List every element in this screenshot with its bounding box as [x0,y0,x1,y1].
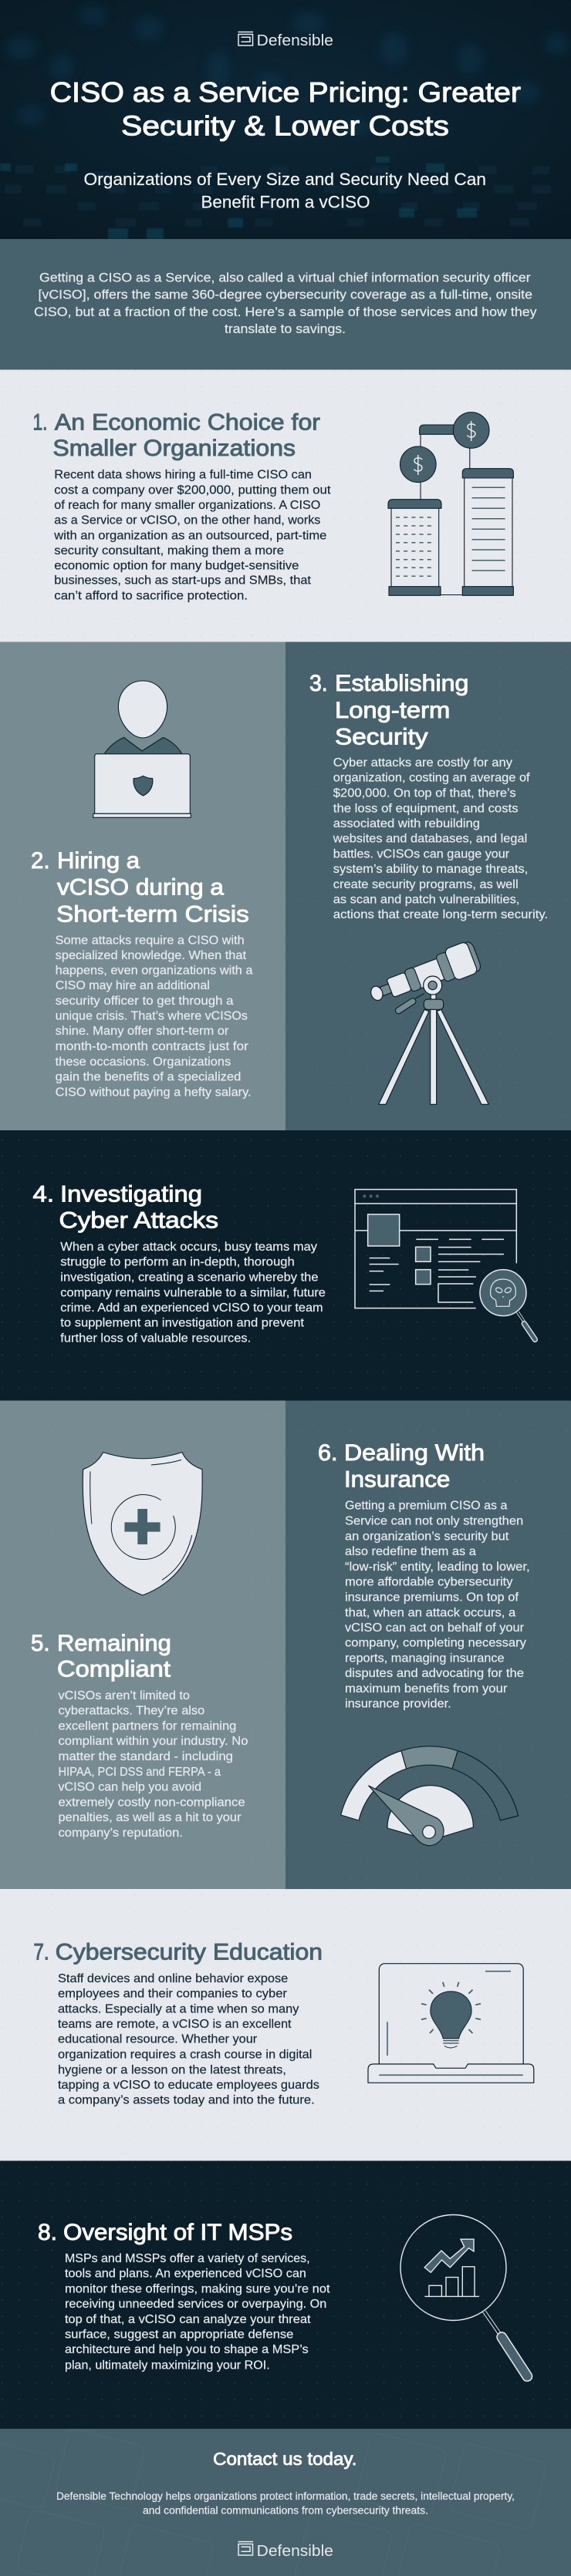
heading 4 [32,1181,218,1234]
body 4: to supplement an investigation and prevent [60,1317,305,1330]
panel: 7 education [0,1889,571,2160]
body 3: Cyber attacks are costly for any [333,756,512,769]
body 2: happens, even organizations with a [56,964,253,978]
body 5: HIPAA, PCI DSS and FERPA - a [59,1766,221,1779]
body 6: that, when an attack occurs, a [345,1606,515,1619]
heading 4: Investigating [60,1181,202,1207]
panel: 5 remaining compliant [0,1400,286,1889]
body 7 [58,1972,319,2107]
heading 7: Cybersecurity Education [56,1940,323,1965]
heading 2: Hiring a [57,848,140,874]
icon: person with laptop [93,681,191,817]
heading 1: An Economic Choice for [55,409,320,435]
body 8: surface, suggest an appropriate defense [65,2329,293,2342]
intro text: Getting a CISO as a Service, also called a virtual chief information security officer [39,271,531,285]
footer text: and confidential communications from cybersecurity threats. [143,2504,428,2517]
body 2: Some attacks require a CISO with [56,934,245,947]
icon: shield with cross [83,1453,202,1595]
body 6: an organization’s security but [345,1530,509,1544]
heading 7: 7. [33,1940,49,1965]
panel: 8 oversight [0,2160,571,2429]
body 3: associated with rebuilding [333,817,480,830]
body 3: organization, costing an average of [333,772,530,785]
body 1: with an organization as an outsourced, part-time [53,529,326,542]
body 1: Recent data shows hiring a full-time CISO can [54,468,312,481]
footer logo: Defensible [257,2543,333,2560]
heading 3: 3. [309,671,328,696]
body 4: When a cyber attack occurs, busy teams may [60,1241,317,1254]
body 2: these occasions. Organizations [56,1056,231,1069]
body 5: matter the standard - including [59,1750,233,1763]
panel: 2 short-term crisis [0,641,286,1130]
icon: telescope [366,939,488,1104]
heading 6 [318,1440,485,1493]
heading 1: Smaller Organizations [52,436,296,461]
body 7: tapping a vCISO to educate employees guards [58,2079,319,2092]
body 8: monitor these offerings, making sure you’re not [65,2283,330,2296]
body 5: penalties, as well as a hit to your [59,1811,242,1824]
icon: magnifier with growth chart [400,2214,527,2376]
body 4 [60,1241,326,1345]
body 6: maximum benefits from your [345,1682,508,1695]
heading 8: 8. [38,2220,57,2245]
panel: header [0,0,571,239]
subtitle: Organizations of Every Size and Security Need Can [83,170,486,189]
body 5: vCISO can help you avoid [59,1780,201,1793]
heading 2: vCISO during a [57,875,224,901]
logo: Defensible [257,32,333,49]
body 2: specialized knowledge. When that [56,949,247,962]
body 3: actions that create long-term security. [333,908,548,921]
body 7: teams are remote, a vCISO is an excellent [58,2018,292,2031]
subtitle: Benefit From a vCISO [201,192,370,211]
heading 4: Cyber Attacks [59,1208,218,1234]
body 1: as a Service or vCISO, on the other hand, works [54,514,320,527]
body 4: further loss of valuable resources. [60,1332,251,1345]
body 8: MSPs and MSSPs offer a variety of services, [65,2252,310,2265]
body 8: architecture and help you to shape a MSP’s [65,2343,309,2356]
body 3: as scan and patch vulnerabilities, [333,894,519,907]
body 7: attacks. Especially at a time when so many [58,2002,299,2015]
body 1: businesses, such as start-ups and SMBs, that [54,574,312,588]
heading 6: Insurance [344,1467,450,1493]
body 6: reports, managing insurance [345,1652,505,1665]
body 6: Service can not only strengthen [345,1515,523,1528]
body 2: CISO may hire an additional [56,979,210,992]
heading 5: 5. [31,1631,50,1656]
body 5: vCISOs aren’t limited to [59,1689,190,1702]
heading 3 [309,671,468,749]
body 4: crime. Add an experienced vCISO to your team [60,1301,323,1315]
icon: browser window with magnified skull [355,1190,535,1339]
body 2: security officer to get through a [56,995,234,1008]
body 1: security consultant, making them a more [54,544,284,557]
body 7: employees and their companies to cyber [58,1988,288,2001]
body 6: vCISO can act on behalf of your [345,1621,525,1635]
intro text: CISO, but at a fraction of the cost. Here’s a sample of those services and how they [34,305,537,319]
heading 2 [31,848,249,927]
heading 3: Establishing [335,671,468,696]
body 3: the loss of equipment, and costs [333,802,519,815]
body 6: also redefine them as a [345,1545,476,1558]
body 7: organization requires a crash course in digital [58,2049,312,2062]
heading 1: 1. [32,409,48,435]
title [50,76,521,142]
body 4: struggle to perform an in-depth, thorough [60,1256,295,1269]
contact heading: Contact us today. [213,2449,356,2469]
heading 3: Security [335,725,427,749]
body 1: economic option for many budget-sensitive [54,560,299,573]
icon: buildings with dollar coins [388,412,513,595]
body 3: $200,000. On top of that, there’s [333,786,516,800]
body 7: hygiene or a lesson on the latest threats, [58,2063,286,2076]
body 6: more affordable cybersecurity [345,1576,512,1588]
intro text [34,271,537,336]
icon: laptop with lightbulb [368,1964,534,2083]
body 6: disputes and advocating for the [345,1667,524,1680]
body 2: unique crisis. That’s where vCISOs [56,1010,248,1023]
body 1 [53,468,331,602]
heading 8: Oversight of IT MSPs [63,2220,292,2245]
body 4: investigation, creating a scenario whereby the [60,1271,319,1284]
footer text [56,2490,515,2517]
body 5: extremely costly non-compliance [59,1796,245,1809]
body 7: Staff devices and online behavior expose [58,1972,288,1985]
body 6: insurance provider. [345,1698,451,1710]
heading 5 [31,1631,171,1682]
heading 3: Long-term [335,698,450,723]
body 8: receiving unneeded services or overpaying. On [65,2298,326,2311]
body 5: compliant within your industry. No [59,1735,248,1748]
panel: footer [0,2428,571,2576]
body 2: CISO without paying a hefty salary. [56,1086,252,1099]
panel: intro [0,239,571,370]
intro text: translate to savings. [225,322,346,336]
heading 2: Short-term Crisis [56,901,249,927]
heading 6: 6. [318,1440,338,1466]
body 6: insurance premiums. On top of [345,1591,519,1604]
body 2: shine. Many offer short-term or [56,1025,229,1038]
body 1: can’t afford to sacrifice protection. [54,589,248,602]
body 8 [65,2252,330,2372]
body 2: gain the benefits of a specialized [56,1070,241,1083]
panel: 3 long-term security [286,641,571,1130]
heading 2: 2. [31,848,50,874]
body 8: tools and plans. An experienced vCISO can [65,2268,306,2281]
body 3: websites and databases, and legal [333,832,527,845]
panel: 6 insurance [286,1400,571,1889]
panel: 4 investigating [0,1130,571,1400]
body 6 [345,1500,530,1710]
body 5: cyberattacks. They’re also [59,1705,204,1718]
body 6: company, completing necessary [345,1637,526,1650]
body 8: plan, ultimately maximizing your ROI. [65,2359,270,2372]
heading 6: Dealing With [344,1440,485,1466]
body 2 [56,934,253,1099]
title: CISO as a Service Pricing: Greater [50,76,521,108]
heading 1 [32,409,320,461]
panel: 1 economic choice [0,370,571,641]
body 5: excellent partners for remaining [59,1720,236,1733]
icon: gauge [341,1746,519,1846]
subtitle [83,170,486,211]
body 4: company remains vulnerable to a similar, future [60,1286,326,1299]
footer text: Defensible Technology helps organizations protect information, trade secrets, intellectual property, [56,2490,515,2502]
body 7: a company’s assets today and into the future. [58,2094,315,2107]
body 8: top of that, a vCISO can analyze your threat [65,2313,311,2326]
heading 5: Compliant [57,1656,171,1682]
body 7: educational resource. Whether your [58,2033,258,2046]
title: Security & Lower Costs [121,110,449,142]
body 5: company’s reputation. [59,1827,183,1840]
body 6: “low-risk” entity, leading to lower, [345,1561,530,1574]
heading 4: 4. [32,1181,54,1207]
body 6: Getting a premium CISO as a [345,1500,508,1513]
body 5 [59,1689,248,1840]
heading 5: Remaining [57,1631,171,1656]
intro text: [vCISO], offers the same 360-degree cybersecurity coverage as a full-time, onsite [39,288,532,302]
body 1: cost a company over $200,000, putting them out [54,483,331,497]
body 3: system’s ability to manage threats, [333,863,528,876]
body 3 [333,756,548,921]
body 3: battles. vCISOs can gauge your [333,847,510,860]
body 1: of reach for many smaller organizations. A CISO [54,499,320,512]
body 2: month-to-month contracts just for [56,1040,249,1053]
body 3: create security programs, as well [333,878,519,891]
